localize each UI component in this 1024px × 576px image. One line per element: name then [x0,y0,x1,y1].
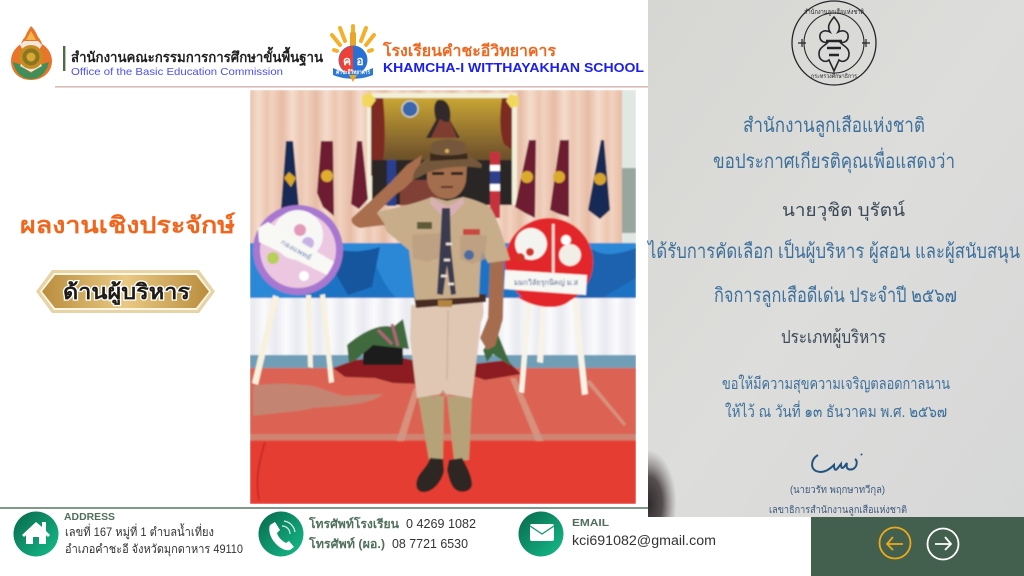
arrow: previous [880,528,910,558]
shoes [416,458,444,492]
badge [36,270,215,313]
text: address: เลขที่ 167 หมู่ที่ 1 ตำบลน้ำเที่ยง [65,523,214,540]
photo: scout saluting [250,90,636,504]
certificate text: นายวุชิต บุรัตน์ [782,200,905,221]
header: office name: สำนักงานคณะกรรมการการศึกษาขั้นพื้นฐาน [71,46,323,67]
certificate text: สำนักงานลูกเสือแห่งชาติ [743,115,925,138]
person [351,139,510,492]
header: school logo: อ [356,54,364,68]
legs [418,396,472,460]
heading: ผลงานเชิงประจักษ์ [20,212,236,238]
header: OBEC logo [11,26,52,80]
scarf [430,197,464,218]
header: office name [63,46,323,78]
text: telephone: 08 7721 6530 [392,537,468,551]
flags [281,140,610,219]
hat [413,139,482,180]
panel: certificate [646,0,1024,517]
text: email: EMAIL [572,517,610,529]
text: telephone: โทรศัพท์ (ผอ.) [308,536,385,551]
pockets [412,233,487,264]
left wreath and stand [252,205,343,385]
salute arm [351,155,422,228]
certificate text: (นายวรัท พฤกษาทวีกุล) [790,484,885,496]
icon: scout seal [792,1,876,85]
red carpet [250,441,636,504]
text: address: ADDRESS [64,511,115,523]
text: email: kci691082@gmail.com [572,533,716,548]
text: telephone [308,516,476,551]
header: school logo: คำชะอีวิทยาคาร [336,68,371,76]
text: address [64,511,243,557]
floor [250,355,636,369]
header: school logo [332,26,374,82]
text: telephone: โทรศัพท์โรงเรียน [308,516,400,531]
icon: scout seal: กระทรวงศึกษาธิการ [811,73,858,80]
text: email [572,517,716,548]
shirt [377,197,510,300]
table drape and skirt [250,243,636,301]
shorts [410,302,484,398]
header: school name [382,41,644,75]
certificate text: ประเภทผู้บริหาร [781,327,886,348]
certificate text: เลขาธิการสำนักงานลูกเสือแห่งชาติ [769,504,907,516]
right wreath and stand: มมกวิลัยรุกนิคญ่ ม.ส [514,278,578,287]
header: school name: KHAMCHA-I WITTHAYAKHAN SCHOOL [383,60,644,75]
curtain [250,90,622,245]
text: telephone: 0 4269 1082 [406,517,476,531]
face [427,165,467,199]
text: address: อำเภอคำชะอี จังหวัดมุกดาหาร 49110 [65,542,243,557]
icon: phone [258,512,304,556]
icon: scout seal: สำนักงานลูกเสือแห่งชาติ [804,8,864,16]
belt [414,294,486,308]
icon: mail [518,512,564,556]
header: office name: Office of the Basic Education Commission [71,66,283,78]
certificate text: ขอประกาศเกียรติคุณเพื่อแสดงว่า [713,147,955,174]
right arm [480,260,504,350]
certificate text: กิจการลูกเสือดีเด่น ประจำปี ๒๕๖๗ [714,285,957,308]
header: school name: โรงเรียนคำชะอีวิทยาคาร [382,41,557,60]
plants and cloth [333,356,521,384]
arrow: next [928,528,958,560]
certificate text: ขอให้มีความสุขความเจริญตลอดกาลนาน [722,374,950,394]
navigation panel [811,517,1024,576]
left wreath and stand: กองแพทย์ [279,238,313,262]
certificate text: ให้ไว้ ณ วันที่ ๑๓ ธันวาคม พ.ศ. ๒๕๖๗ [725,400,947,421]
certificate text [646,115,1020,516]
icon: home [14,512,58,556]
footer rule [0,507,648,509]
badge: ด้านผู้บริหาร [63,280,191,306]
header: school logo: ค [343,54,351,68]
header rule [55,86,648,88]
right wreath and stand [504,218,593,395]
portrait banner [362,92,519,218]
